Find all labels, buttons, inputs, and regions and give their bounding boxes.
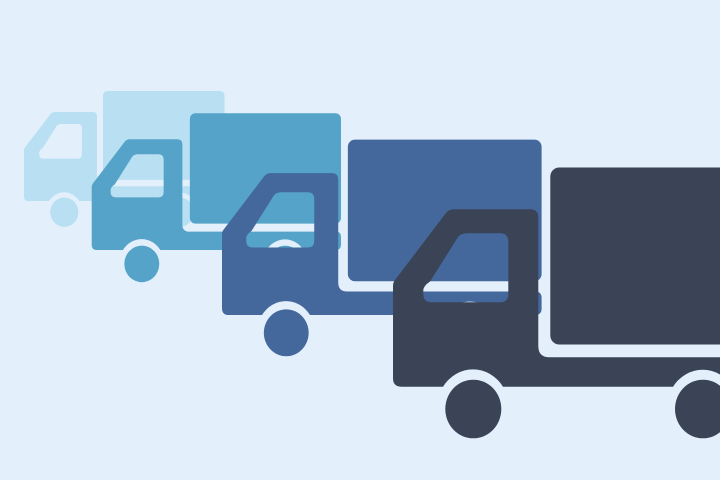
truck: light blue (92, 113, 341, 282)
truck: palest, furthest back (24, 91, 225, 227)
truck: dark navy, front (393, 168, 720, 438)
truck: mid blue (222, 140, 542, 356)
